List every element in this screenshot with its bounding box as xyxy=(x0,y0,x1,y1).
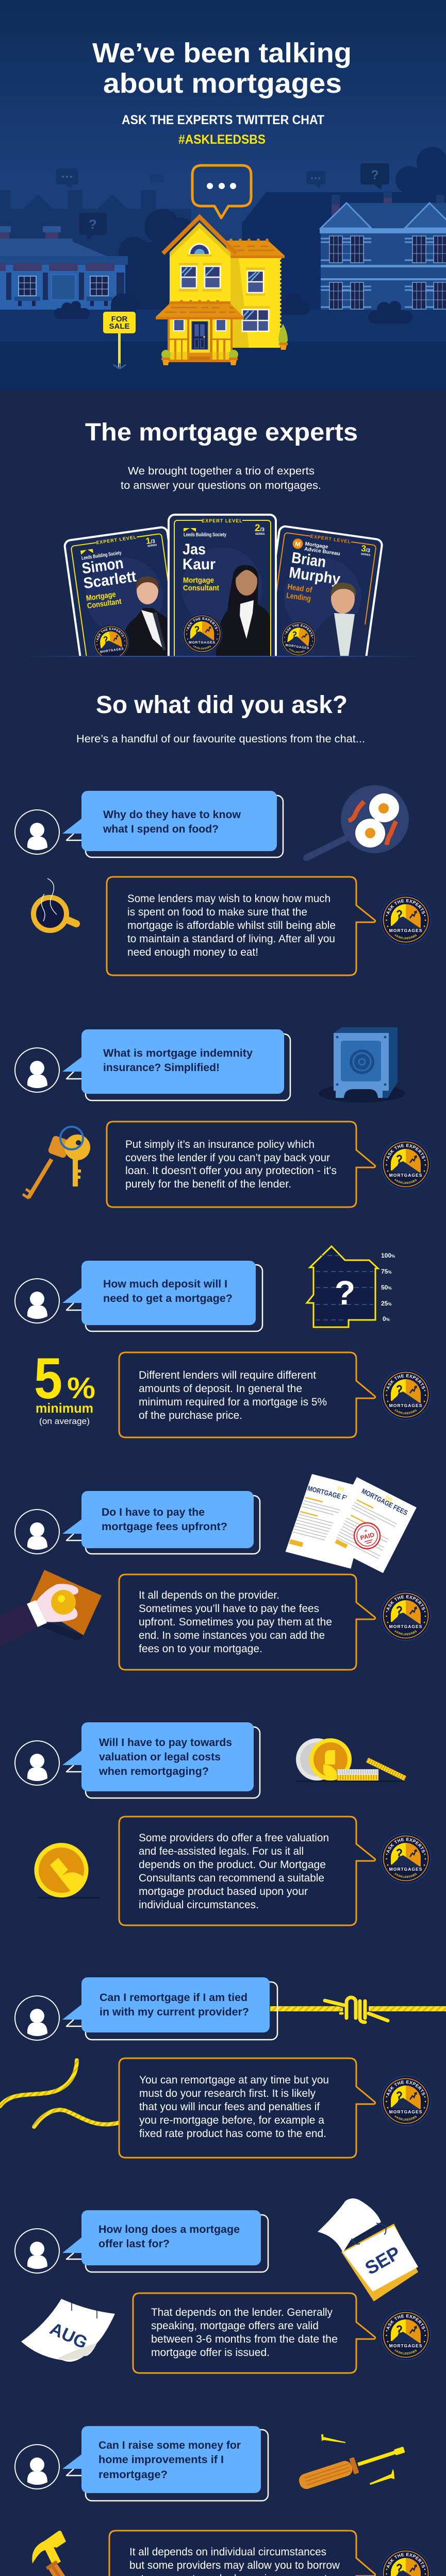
icon: hand with coin xyxy=(0,1570,102,1647)
icon: mortgage fee documents: MORTGAGE FEES xyxy=(360,1487,409,1517)
question bubble xyxy=(62,1491,260,1554)
badge on card: ASK THE EXPERTS xyxy=(96,628,124,641)
badge: #ASKLEEDSBS xyxy=(394,1630,417,1635)
answer bubble xyxy=(109,2531,375,2576)
icon: AUG calendar page: AUG xyxy=(47,2319,90,2353)
badge: #ASKLEEDSBS xyxy=(394,934,417,939)
question bubble: What is mortgage indemnity xyxy=(103,1047,253,1059)
card: Brian Murphy: SERIES xyxy=(361,553,371,557)
question bubble: Do I have to pay the xyxy=(102,1506,205,1518)
sky background xyxy=(0,0,446,175)
right wing xyxy=(230,258,280,348)
answer bubble: Put simply it’s an insurance policy which xyxy=(125,1138,315,1150)
badge: MORTGAGES xyxy=(389,1624,422,1629)
answer bubble xyxy=(119,1574,375,1670)
question bubble xyxy=(62,1977,277,2040)
card: Jas Kaur: 2/3 xyxy=(255,523,265,534)
heading: the mortgage experts: The mortgage experts xyxy=(85,419,358,446)
plants xyxy=(161,350,171,359)
icon: person avatar xyxy=(15,1741,59,1785)
intro text: to answer your questions on mortgages. xyxy=(121,479,321,492)
answer bubble: mortgage product based upon your xyxy=(139,1885,308,1897)
stat: 5% minimum xyxy=(34,1346,95,1426)
icon: coffee cup xyxy=(34,878,76,930)
icon: frying pan xyxy=(303,785,409,861)
badge: ASK THE EXPERTS xyxy=(387,899,425,914)
ground xyxy=(0,310,446,342)
answer bubble: but some providers may allow you to borrow xyxy=(129,2559,340,2571)
question bubble: mortgage fees upfront? xyxy=(102,1520,227,1533)
badge xyxy=(381,2076,431,2126)
icon: person avatar xyxy=(15,2445,59,2489)
answer bubble: and fee-assisted legals. For us it all xyxy=(139,1845,304,1857)
answer bubble: individual circumstances. xyxy=(139,1899,259,1911)
chart: house deposit scale: 100% xyxy=(381,1252,395,1259)
card: Jas Kaur: Kaur xyxy=(183,556,216,573)
card: Simon Scarlett: Leeds Building Society xyxy=(81,550,122,562)
card: Brian Murphy: M xyxy=(294,540,301,548)
question bubble: need to get a mortgage? xyxy=(103,1292,233,1304)
icon: mortgage fee documents: (×) xyxy=(385,1495,393,1503)
title: We’ve been talking xyxy=(92,38,352,69)
answer bubble: Some providers do offer a free valuation xyxy=(139,1832,329,1844)
badge on card xyxy=(280,621,317,656)
answer bubble: of the purchase price. xyxy=(139,1409,242,1421)
question bubble: insurance? Simplified! xyxy=(103,1061,220,1074)
answer bubble: mortgage offer is issued. xyxy=(151,2346,270,2359)
intro text xyxy=(121,465,321,492)
badge xyxy=(381,1139,431,1190)
card: Simon Scarlett: Mortgage xyxy=(86,590,117,603)
answer bubble: is spent on food to make sure that the xyxy=(127,906,307,918)
question bubble: home improvements if I xyxy=(98,2453,224,2466)
question bubble: How long does a mortgage xyxy=(98,2223,240,2235)
icon: mortgage fee documents xyxy=(286,1472,417,1573)
badge: ASK THE EXPERTS xyxy=(387,1838,425,1853)
for sale sign: FOR xyxy=(111,315,127,324)
answer bubble xyxy=(119,1352,375,1437)
panel: question 6 xyxy=(0,1977,446,2159)
badge: ASK THE EXPERTS xyxy=(387,2080,425,2096)
card: Brian Murphy: Head of xyxy=(287,583,313,595)
card: Jas Kaur: Consultant xyxy=(183,584,219,592)
left house xyxy=(0,226,128,310)
badge: MORTGAGES xyxy=(389,1173,422,1178)
bushes xyxy=(54,293,412,324)
answer bubble: amounts of deposit. In general the xyxy=(139,1382,302,1395)
card: Brian Murphy: Mortgage xyxy=(305,541,328,550)
icon: mortgage fee documents: MORTGAGE FEES xyxy=(307,1484,358,1504)
question bubble xyxy=(62,1261,262,1331)
panel: expert cards xyxy=(64,514,383,656)
panel: question 2 xyxy=(14,1027,431,1208)
answer bubble: to maintain a standard of living. After all you xyxy=(127,933,335,945)
badge: ASK THE EXPERTS xyxy=(387,1595,425,1611)
question bubble: in with my current provider? xyxy=(100,2006,249,2018)
badge: MORTGAGES xyxy=(389,2343,422,2348)
panel: question 1 xyxy=(14,785,431,976)
badge on card xyxy=(182,614,222,654)
icon: person avatar xyxy=(15,1996,59,2040)
badge: ASK THE EXPERTS xyxy=(387,1374,425,1389)
question bubble xyxy=(62,1722,260,1798)
stat: 5% minimum: minimum xyxy=(36,1400,93,1416)
question bubble: what I spend on food? xyxy=(103,823,219,835)
badge: #ASKLEEDSBS xyxy=(394,1873,417,1878)
icon: speech bubble over house xyxy=(192,165,251,218)
answer bubble: Consultants can recommend a suitable xyxy=(139,1872,324,1884)
card: Simon Scarlett: 1/3 xyxy=(145,535,156,546)
card: Jas Kaur: Mortgage xyxy=(183,576,214,585)
question bubble: Why do they have to know xyxy=(103,808,241,821)
icon: SEP calendar xyxy=(318,2198,418,2301)
windows xyxy=(189,243,210,254)
question bubble xyxy=(62,2426,268,2501)
badge on card: #ASKLEEDSBS xyxy=(289,648,305,653)
badge: MORTGAGES xyxy=(389,2109,422,2114)
answer bubble: need enough money to eat! xyxy=(127,946,258,958)
question bubble: Can I remortgage if I am tied xyxy=(100,1991,247,2004)
chart: house deposit scale: 25% xyxy=(381,1300,391,1307)
answer bubble: purely for the benefit of the lender. xyxy=(125,1178,291,1190)
badge: ASK THE EXPERTS xyxy=(387,1144,425,1159)
card: Brian Murphy xyxy=(277,526,383,656)
answer bubble: Sometimes you’ll have to pay the fees xyxy=(139,1602,319,1615)
icon: coins xyxy=(296,1738,405,1782)
stat: 5% minimum: 5 xyxy=(34,1346,62,1411)
answer bubble xyxy=(133,2293,375,2373)
panel: question 4 xyxy=(0,1474,431,1670)
panel: question 8 xyxy=(14,2426,431,2576)
chart: house deposit scale: 50% xyxy=(381,1284,391,1291)
panel: question 7 xyxy=(14,2198,431,2374)
card: Jas Kaur: Leeds Building Society xyxy=(184,532,226,538)
badge: #ASKLEEDSBS xyxy=(394,2349,417,2354)
question bubble: when remortgaging? xyxy=(98,1765,209,1777)
answer bubble xyxy=(119,2058,375,2158)
right house xyxy=(320,191,446,310)
icon: keys xyxy=(23,1127,90,1198)
panel: question 5 xyxy=(14,1722,431,1926)
chart: house deposit scale: 75% xyxy=(381,1268,391,1275)
stamp: paid: PAID xyxy=(359,1531,375,1541)
for sale sign xyxy=(103,312,136,369)
icon: person avatar xyxy=(15,810,59,854)
card: Brian Murphy: 3/3 xyxy=(360,544,371,554)
badge: #ASKLEEDSBS xyxy=(394,1409,417,1414)
icon: safe xyxy=(319,1027,405,1103)
gable xyxy=(170,223,230,304)
badge xyxy=(381,2310,431,2360)
badge: ASK THE EXPERTS xyxy=(387,2314,425,2330)
answer bubble: speaking, mortgage offers are valid xyxy=(151,2319,319,2332)
answer bubble: covers the lender if you can’t pay back your xyxy=(125,1151,330,1164)
answer bubble xyxy=(107,1122,375,1207)
answer bubble xyxy=(119,1817,375,1925)
chart: house deposit scale: ? xyxy=(335,1274,355,1312)
photo: Brian xyxy=(316,583,366,656)
badge xyxy=(381,1833,431,1884)
question bubble xyxy=(62,2210,268,2272)
question bubble xyxy=(62,1029,290,1100)
card: Jas Kaur: SERIES xyxy=(255,533,265,536)
badge: #ASKLEEDSBS xyxy=(394,2115,417,2121)
answer bubble: that you will incur fees and penalties if xyxy=(139,2100,320,2113)
badge xyxy=(381,1369,431,1420)
photo: Simon xyxy=(121,577,167,656)
answer bubble: That depends on the lender. Generally xyxy=(151,2306,333,2318)
chart: house deposit scale xyxy=(307,1246,395,1327)
icon: person avatar xyxy=(15,1279,59,1323)
question bubble: Will I have to pay towards xyxy=(99,1736,232,1749)
card: Simon Scarlett: SERIES xyxy=(147,544,157,548)
chart: house deposit scale: 0% xyxy=(383,1315,390,1323)
answer bubble: you re-mortgage before, for example a xyxy=(139,2114,324,2126)
icon: person avatar xyxy=(15,2229,59,2273)
badge: MORTGAGES xyxy=(389,928,422,933)
card: Jas Kaur: EXPERT LEVEL xyxy=(202,518,243,523)
badge on card: MORTGAGES xyxy=(189,641,216,645)
icon: AUG calendar page xyxy=(21,2299,115,2362)
question bubble xyxy=(62,791,283,857)
title: about mortgages xyxy=(103,68,342,99)
icon: loose ropes xyxy=(0,2060,119,2127)
icon: mortgage fee documents: (×) xyxy=(337,1485,344,1493)
card: Simon Scarlett: Simon xyxy=(81,555,124,578)
yellow house xyxy=(156,217,288,365)
icon: hammer xyxy=(32,2531,82,2576)
answer bubble: Some lenders may wish to know how much xyxy=(127,892,331,905)
subtitle: ASK THE EXPERTS TWITTER CHAT xyxy=(122,113,324,127)
panel: header scene xyxy=(0,0,446,391)
question bubble: remortgage? xyxy=(98,2468,168,2481)
panel: question 3 xyxy=(14,1245,431,1438)
hashtag: #ASKLEEDSBS xyxy=(178,132,266,147)
intro text: We brought together a trio of experts xyxy=(128,465,315,477)
answer bubble xyxy=(107,877,375,975)
intro text: questions: Here’s a handful of our favourite questions from the chat... xyxy=(76,733,365,745)
badge on card: #ASKLEEDSBS xyxy=(193,645,211,649)
badge xyxy=(381,894,431,945)
card: Jas Kaur xyxy=(168,514,277,656)
card: Brian Murphy: Advice Bureau xyxy=(304,546,340,557)
icon: screwdriver and screws xyxy=(297,2434,407,2491)
icon: gold coin xyxy=(34,1843,100,1899)
icon: person avatar xyxy=(15,1048,59,1092)
faint chat bubbles: ? xyxy=(371,168,379,182)
for sale sign: SALE xyxy=(109,322,130,331)
background houses silhouettes xyxy=(0,147,446,319)
badge: ASK THE EXPERTS xyxy=(387,2553,425,2568)
card: Jas Kaur: Jas xyxy=(183,541,206,558)
card: Simon Scarlett: EXPERT LEVEL xyxy=(96,534,137,545)
card: Simon Scarlett: Consultant xyxy=(87,597,122,611)
answer bubble: end. In some instances you can add the xyxy=(139,1629,325,1641)
stat: 5% minimum: (on average) xyxy=(39,1416,90,1426)
card: Brian Murphy: Lending xyxy=(286,591,311,603)
badge on card: MORTGAGES xyxy=(100,647,124,654)
answer bubble: It all depends on individual circumstances xyxy=(129,2546,326,2558)
badge: #ASKLEEDSBS xyxy=(394,1179,417,1184)
badge xyxy=(381,2548,431,2576)
badge on card: MORTGAGES xyxy=(285,643,309,650)
answer bubble: mortgage is affordable whilst still being able xyxy=(127,919,336,931)
card: Brian Murphy: Brian xyxy=(290,549,327,571)
answer bubble: Different lenders will require different xyxy=(139,1369,316,1381)
question bubble: How much deposit will I xyxy=(103,1278,227,1290)
card: Brian Murphy: EXPERT LEVEL xyxy=(310,534,352,545)
question bubble: Can I raise some money for xyxy=(98,2439,241,2451)
badge xyxy=(381,1590,431,1641)
icon: person avatar xyxy=(15,1510,59,1554)
answer bubble: depends on the product. Our Mortgage xyxy=(139,1858,326,1871)
question bubble: valuation or legal costs xyxy=(99,1751,221,1763)
card: Simon Scarlett: Scarlett xyxy=(82,568,137,592)
badge on card xyxy=(93,624,129,656)
badge: MORTGAGES xyxy=(389,1867,422,1872)
icon: rope with knot xyxy=(270,1997,446,2022)
tree behind house xyxy=(144,209,179,244)
answer bubble: between 3-6 months from the date the xyxy=(151,2333,338,2345)
faint chat bubbles xyxy=(56,163,389,240)
card: Brian Murphy: Murphy xyxy=(288,564,341,588)
badge: MORTGAGES xyxy=(389,1403,422,1408)
card: Simon Scarlett xyxy=(64,527,168,656)
photo: Jas xyxy=(216,565,270,656)
answer bubble: must do your research first. It is likely xyxy=(139,2087,316,2099)
answer bubble: It all depends on the provider. xyxy=(139,1589,279,1601)
title xyxy=(92,38,352,99)
answer bubble: fixed rate product has come to the end. xyxy=(139,2127,326,2140)
badge on card: ASK THE EXPERTS xyxy=(286,624,313,637)
answer bubble: fees on to your mortgage. xyxy=(139,1642,262,1655)
answer bubble: minimum required for a mortgage is 5% xyxy=(139,1396,327,1408)
answer bubble: upfront. Sometimes you pay them at the xyxy=(139,1616,332,1628)
answer bubble: loan. It doesn't offer you any protection - it's xyxy=(125,1164,337,1177)
question bubble: offer last for? xyxy=(98,2238,170,2250)
stamp: paid: × xyxy=(364,1528,368,1534)
porch xyxy=(168,318,233,362)
answer bubble: You can remortgage at any time but you xyxy=(139,2074,329,2086)
stat: 5% minimum: % xyxy=(67,1371,95,1405)
stamp: paid xyxy=(351,1520,383,1552)
icon: SEP calendar: SEP xyxy=(361,2242,404,2279)
faint chat bubbles: ? xyxy=(89,217,97,232)
badge on card: ASK THE EXPERTS xyxy=(187,617,218,630)
heading: so what did you ask: So what did you ask? xyxy=(96,691,348,719)
